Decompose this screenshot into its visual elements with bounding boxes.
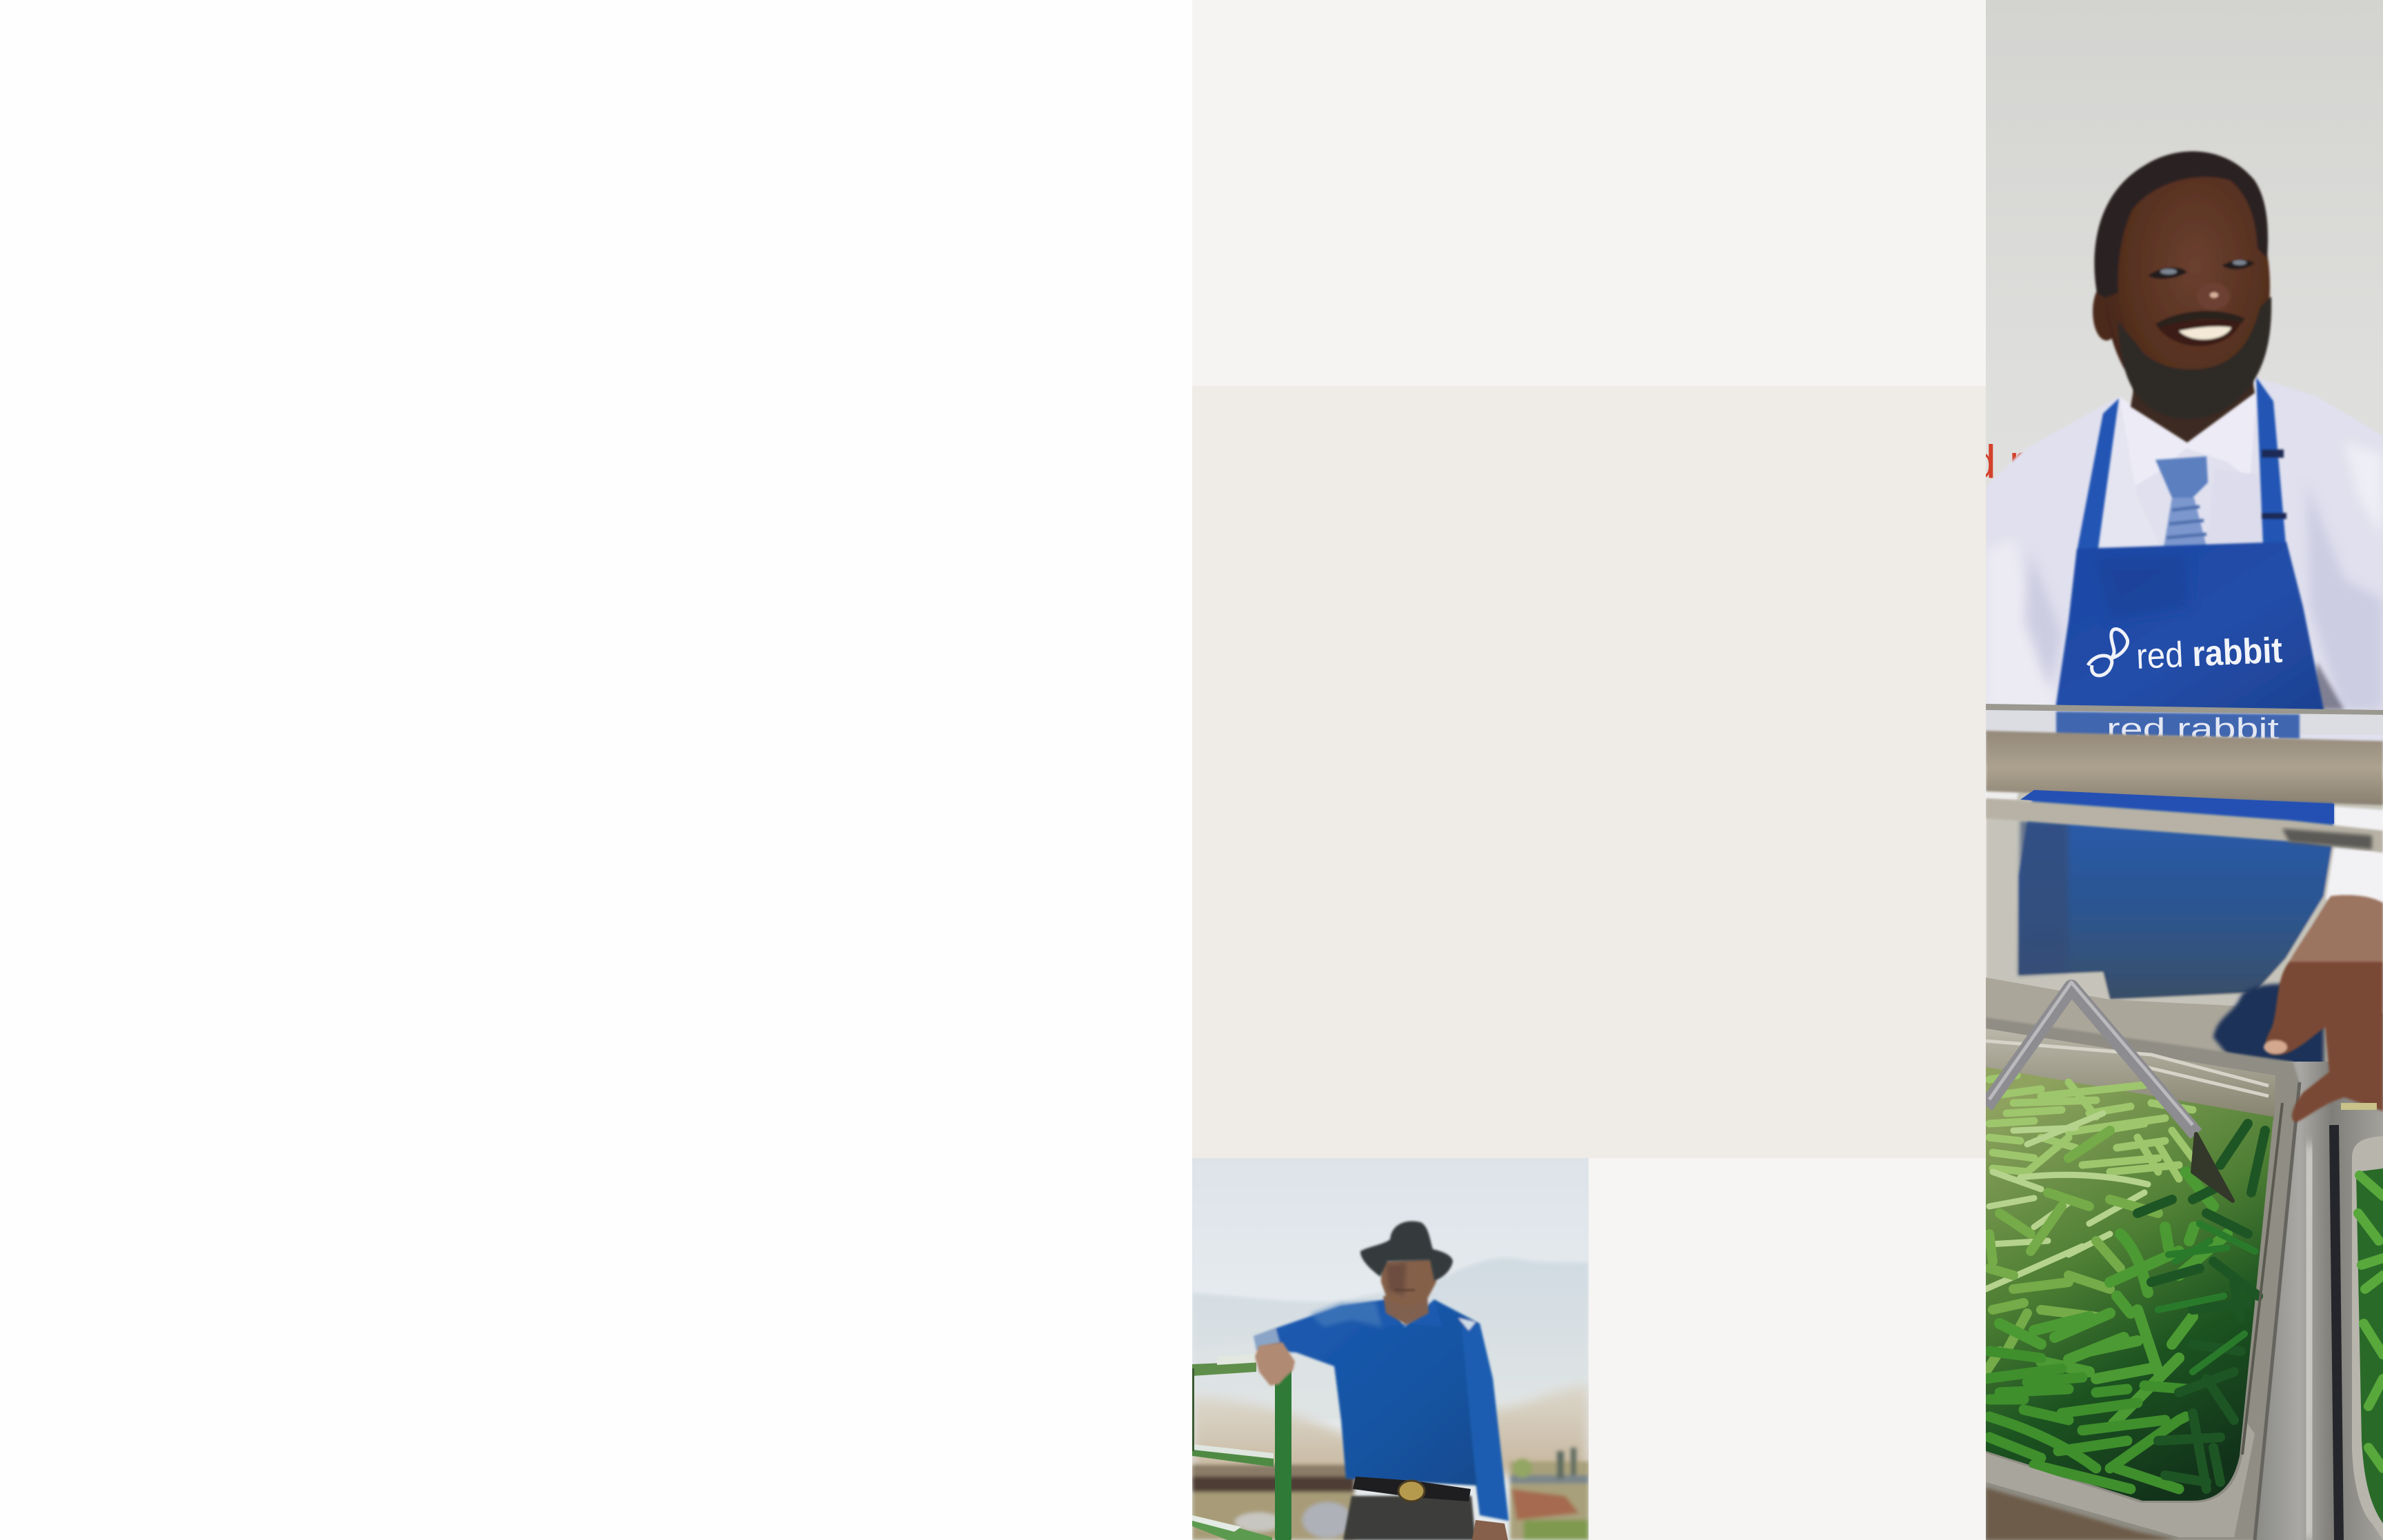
rancher: arm and shirt — [1254, 1299, 1509, 1521]
server's hand on tongs — [2264, 895, 2383, 1122]
photo: server in blue apron behind food counter — [1970, 0, 2383, 1540]
moustache — [2155, 311, 2245, 330]
beans in the tray — [1986, 1067, 2273, 1501]
face skin — [2104, 159, 2270, 414]
dark reflection on lower rail — [2282, 829, 2372, 849]
man: blue apron with straps — [2055, 377, 2324, 713]
second tray beans — [2356, 1168, 2383, 1523]
tray front metal lip — [1986, 1420, 2255, 1537]
apron logo: red rabbit wordmark: red rabbit — [2135, 630, 2283, 677]
photo: rancher in blue shirt leaning on green gate — [1192, 1158, 1589, 1540]
red wall lettering: d r — [1970, 436, 2024, 488]
reflection of apron — [2056, 711, 2300, 739]
rancher: hand on post — [1255, 1342, 1295, 1386]
ear — [2093, 283, 2120, 341]
panel: bottom right light block — [1589, 1158, 1986, 1540]
green gate — [1192, 1354, 1291, 1540]
ground and machinery — [1192, 1448, 1589, 1540]
foreground tan hills — [1192, 1384, 1589, 1482]
hair — [2094, 151, 2268, 298]
rancher: lower hand — [1472, 1520, 1508, 1540]
rancher: hat — [1360, 1221, 1453, 1281]
tray bottom rust edge — [1986, 1488, 2179, 1540]
second tray with beans — [2352, 1136, 2383, 1540]
light beans — [1989, 1075, 2203, 1179]
rancher: neck and face — [1381, 1258, 1436, 1325]
steel bar — [1986, 731, 2383, 805]
pan: left steel tray — [1986, 1017, 2300, 1540]
sneeze guard: top glass reflection band — [1986, 710, 2383, 735]
photo background wall — [1986, 0, 2383, 758]
dark beans — [2138, 1124, 2265, 1489]
wristband detail — [2341, 1103, 2377, 1110]
dark hat reflection — [2213, 984, 2324, 1082]
sky — [1192, 1158, 1589, 1540]
lower apron seen through glass — [1986, 776, 2383, 1020]
apron logo: rabbit mark — [2088, 629, 2128, 676]
teeth — [2179, 327, 2231, 339]
counter surface — [1986, 977, 2383, 1540]
pan rim highlights — [1986, 1041, 2269, 1096]
mid green beans — [2000, 1172, 2227, 1424]
right side metal — [2255, 1062, 2383, 1540]
blue apron strip between rails — [2020, 790, 2334, 824]
reflected wordmark: red rabbit — [2107, 712, 2279, 746]
panel: blank white left area — [0, 0, 1192, 1540]
distant mountains — [1192, 1258, 1589, 1420]
panel: top light grey block — [1192, 0, 1986, 386]
man: tie — [2155, 456, 2208, 556]
mouth — [2158, 319, 2241, 346]
pan inner wall — [1986, 1029, 2275, 1120]
rancher: belt buckle — [1398, 1481, 1425, 1501]
rancher: trousers — [1343, 1496, 1476, 1540]
vertical metal dividers — [2242, 1082, 2339, 1540]
beans base — [1986, 1067, 2273, 1501]
steel rail lower — [1986, 798, 2383, 853]
counter glass rail thin — [1986, 704, 2383, 715]
panel: middle beige block — [1192, 386, 1986, 1158]
nose — [2197, 283, 2230, 310]
tongs — [1986, 982, 2233, 1201]
rancher: belt — [1353, 1477, 1471, 1501]
beard — [2118, 296, 2271, 419]
man: head — [2093, 151, 2271, 419]
man: neck — [2131, 372, 2255, 443]
man: shirt — [1986, 377, 2383, 765]
eyes — [2148, 267, 2187, 279]
